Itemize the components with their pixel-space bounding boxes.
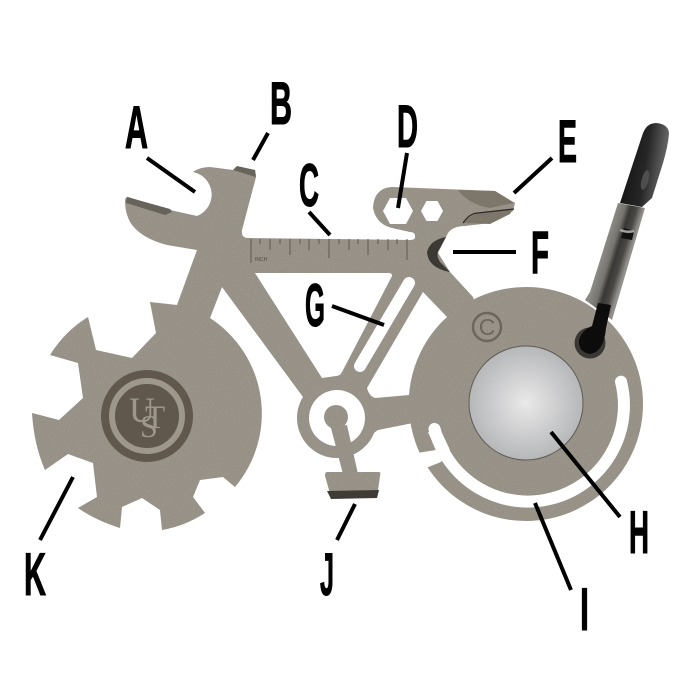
callout I — [535, 503, 589, 643]
callout H — [551, 432, 649, 566]
callout G: G — [305, 272, 325, 339]
frame, fork, wrench, bottle opener and gear outline — [32, 167, 515, 530]
copyright mark — [473, 313, 501, 341]
callout F — [453, 219, 549, 286]
callout B: B — [270, 70, 292, 137]
UST logo: T — [145, 400, 165, 436]
wrench jaw bevel — [126, 197, 172, 215]
crank hub — [297, 397, 374, 458]
right wheel disc — [409, 287, 643, 521]
callout E — [514, 108, 577, 193]
cutting blade bevels — [458, 190, 514, 224]
text: D — [397, 93, 418, 160]
callout J: J — [320, 541, 334, 608]
carabiner spring gate — [585, 203, 645, 320]
carabiner lower loop — [574, 303, 611, 358]
wire notch shadow — [427, 237, 450, 272]
callout A — [125, 94, 195, 192]
bicycle multi-tool body — [32, 167, 643, 530]
ruler markings — [251, 239, 407, 263]
bottle opener bevel — [233, 166, 256, 177]
text: F — [531, 219, 549, 286]
copyright mark: C — [479, 314, 495, 340]
carabiner upper hook — [620, 123, 669, 207]
magnifying lens — [469, 346, 583, 460]
callout B — [253, 70, 292, 160]
callout J — [320, 504, 355, 608]
text: E — [558, 108, 577, 175]
callout K: K — [24, 541, 46, 608]
ruler inch text: INCH — [255, 257, 268, 263]
callout K — [24, 477, 73, 608]
UST logo: S — [140, 408, 158, 444]
crank arm — [338, 454, 358, 472]
carabiner clip — [585, 123, 669, 320]
callout C — [299, 152, 330, 235]
callout A: A — [125, 94, 148, 161]
UST logo — [101, 370, 193, 462]
callout D — [397, 93, 418, 208]
callout I: I — [580, 576, 589, 643]
carabiner gate latch — [621, 228, 634, 240]
pedal edge — [327, 490, 379, 499]
UST logo: U — [129, 390, 155, 430]
callout G — [305, 272, 384, 339]
text: H — [629, 499, 649, 566]
callout C: C — [299, 152, 319, 219]
pedal — [325, 472, 380, 491]
